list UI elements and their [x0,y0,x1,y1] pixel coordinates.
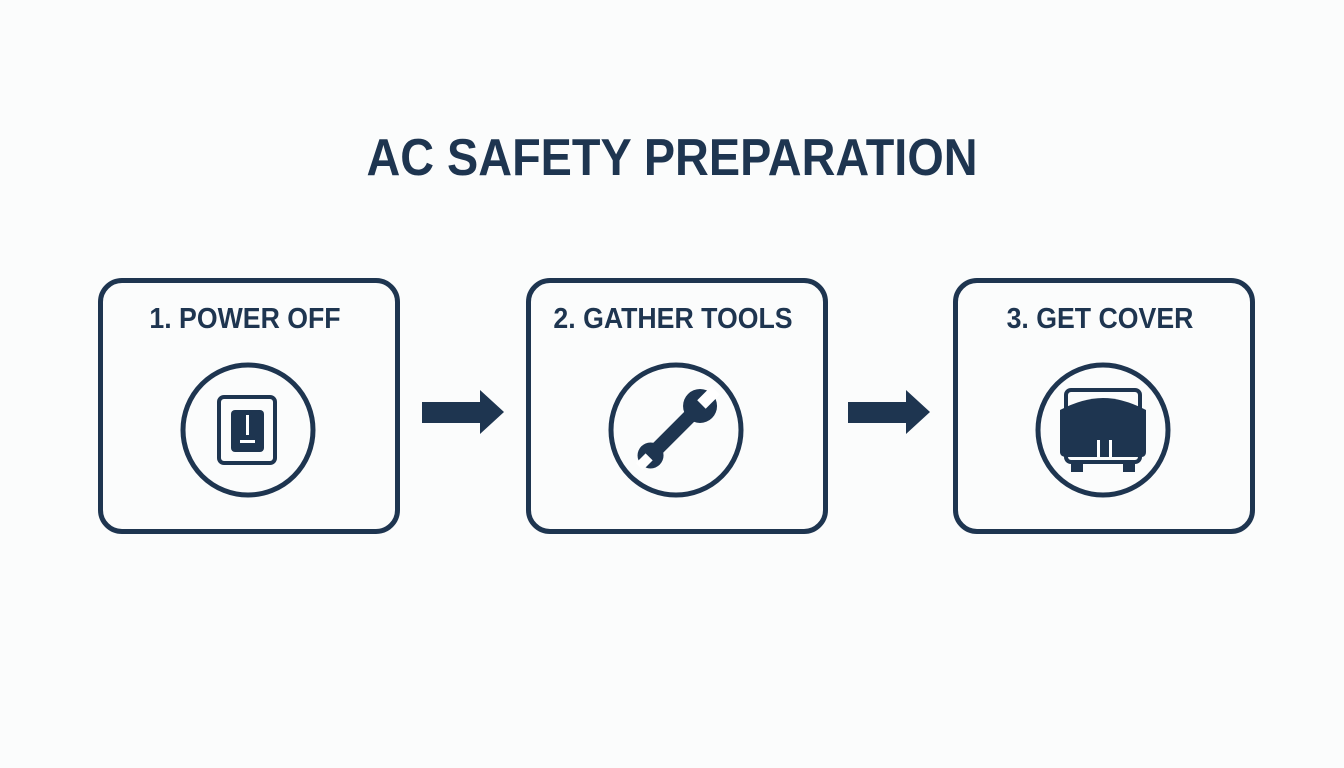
label: power off: 1. POWER OFF [149,303,341,335]
panel: gather tools [526,278,828,534]
label: get cover: 3. GET COVER [1007,303,1193,335]
icon: AC cover [1036,362,1170,498]
arrow 2 [848,390,930,434]
arrow 1 [422,390,504,434]
label: gather tools: 2. GATHER TOOLS [553,303,793,335]
icon: wrench [608,362,744,498]
panel: power off [98,278,400,534]
title: AC SAFETY PREPARATION [366,129,978,187]
icon: power switch [180,362,316,498]
panel: get cover [953,278,1255,534]
